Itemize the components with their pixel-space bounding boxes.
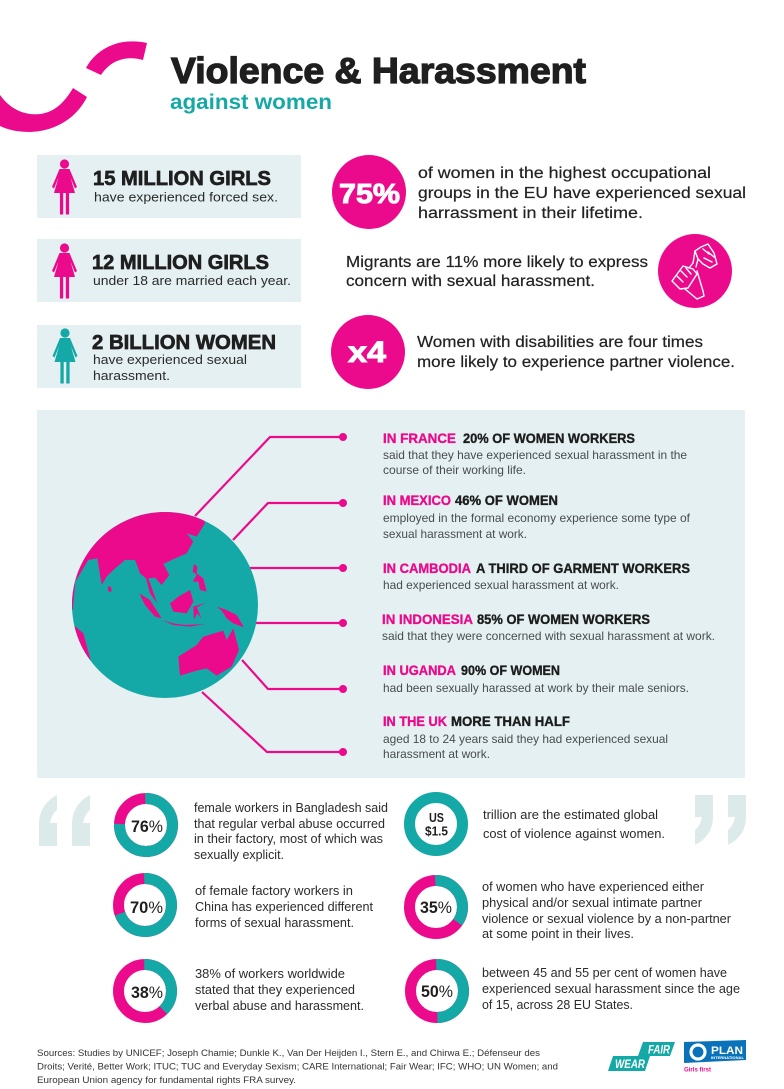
stat: 50 percent: between 45 and 55 per cent of women have [482, 966, 727, 980]
stat: 76 percent: 76% [131, 817, 163, 836]
title: Violence & Harassment [171, 50, 586, 91]
panel: 15 million girls [37, 155, 301, 218]
text: France: IN FRANCE [383, 430, 456, 446]
panel: 2 billion women: have experienced sexual [93, 352, 247, 367]
stat: 35 percent [410, 880, 731, 941]
logo: Plan International: PLAN [711, 1045, 743, 1057]
text: France [383, 430, 687, 477]
stat: 50 percent [410, 964, 740, 1018]
stat: 70 percent: forms of sexual harassment. [195, 916, 354, 930]
text: Indonesia: said that they were concerned with sexual harassment at work. [382, 629, 715, 643]
panel: 12 million girls [37, 239, 301, 302]
stat: 76 percent: sexually explicit. [194, 848, 284, 862]
subtitle: against women [170, 91, 332, 114]
stat: US 1.5 trillion: cost of violence against women. [483, 827, 665, 841]
text: UK: aged 18 to 24 years said they had experienced sexual [383, 732, 668, 746]
stat: US 1.5 trillion [410, 798, 665, 850]
text: Cambodia: A THIRD OF GARMENT WORKERS [476, 560, 690, 576]
logo swoosh [0, 41, 147, 132]
stat: 35 percent: at some point in their lives. [482, 927, 634, 941]
text: UK: harassment at work. [383, 747, 490, 761]
panel: 2 billion women [37, 325, 301, 388]
icon: closing quote [695, 795, 746, 845]
panel: 12 million girls: 12 MILLION GIRLS [92, 251, 269, 274]
stat: 70 percent [118, 878, 374, 932]
stat: 35 percent: 35% [420, 898, 452, 917]
panel: country statistics [37, 410, 745, 778]
logo: Plan International: INTERNATIONAL [711, 1056, 745, 1060]
text: Indonesia: 85% OF WOMEN WORKERS [477, 611, 650, 627]
sources: Droits; Verité, Better Work; ITUC; TUC and Everyday Sexism; CARE International; Fair Wear; IFC; WHO; UN Women; and [37, 1062, 558, 1072]
icon: woman pink [52, 159, 77, 214]
text: Cambodia: IN CAMBODIA [383, 560, 471, 576]
icon: woman teal [52, 328, 78, 384]
donut 70 [118, 878, 172, 932]
stat: 50 percent: of 15, across 28 EU States. [482, 998, 633, 1012]
stat: 76 percent: that regular verbal abuse occurred [194, 817, 385, 831]
text: Uganda: had been sexually harassed at work by their male seniors. [383, 681, 689, 695]
panel: 15 million girls: have experienced forced sex. [94, 190, 278, 204]
stat: 38 percent: 38% [131, 983, 163, 1002]
text: France: said that they have experienced sexual harassment in the [383, 448, 687, 462]
donut 50 [410, 964, 464, 1018]
logo: Plan International [684, 1040, 746, 1074]
logo: Fair Wear [608, 1042, 675, 1071]
sources: European Union agency for fundamental rights FRA survey. [37, 1075, 296, 1086]
stat: US 1.5 trillion: trillion are the estimated global [483, 808, 658, 822]
text: Mexico: employed in the formal economy experience some type of [383, 511, 691, 525]
logo: Fair Wear: WEAR [615, 1057, 645, 1071]
stat: 75 percent [332, 155, 746, 229]
panel: 2 billion women: 2 BILLION WOMEN [92, 331, 276, 354]
stat: 75 percent: harrassment in their lifetime. [418, 205, 643, 222]
text: Mexico [383, 492, 691, 541]
stat: 70 percent: China has experienced different [195, 900, 374, 914]
sources [37, 1048, 558, 1086]
donut 38 [118, 964, 172, 1018]
stat: x4: more likely to experience partner violence. [417, 354, 735, 371]
globe [67, 500, 258, 698]
text: Uganda [383, 662, 689, 695]
sources: Sources: Studies by UNICEF; Joseph Chamie; Dunkle K., Van Der Heijden I., Stern E., and Chirwa E.; Défenseur des [37, 1048, 540, 1059]
connector lines [195, 437, 343, 752]
stat: 38 percent: verbal abuse and harassment. [195, 999, 364, 1013]
text: France: 20% OF WOMEN WORKERS [463, 430, 635, 446]
text: UK: MORE THAN HALF [451, 713, 570, 729]
stat: 76 percent: female workers in Bangladesh said [194, 801, 388, 815]
text: Mexico: 46% OF WOMEN [455, 492, 558, 508]
panel: 12 million girls: under 18 are married each year. [93, 273, 291, 288]
stat: migrants [346, 234, 732, 308]
panel: 15 million girls: 15 MILLION GIRLS [93, 167, 271, 190]
logo: Plan International: Girls first [684, 1066, 712, 1074]
stat: migrants: Migrants are 11% more likely to express [346, 254, 648, 271]
icon: opening quote [39, 795, 90, 846]
donut 76 [120, 798, 172, 852]
stat: US 1.5 trillion: $1.5 [425, 824, 448, 838]
stat: 35 percent: of women who have experienced either [482, 880, 704, 894]
text: UK [383, 713, 668, 761]
donut full [410, 798, 462, 850]
stat: 70 percent: 70% [130, 898, 163, 917]
connector dots [339, 433, 347, 756]
stat: 75 percent: groups in the EU have experienced sexual [418, 185, 746, 202]
text: France: course of their working life. [383, 463, 526, 477]
stat: 38 percent [118, 964, 364, 1018]
stat: x4: x4 [348, 336, 386, 369]
stat: 38 percent: stated that they experienced [195, 983, 355, 997]
stat: x4 [331, 315, 735, 389]
icon: raised fists [672, 244, 717, 299]
text: Uganda: IN UGANDA [383, 662, 456, 678]
panel: 2 billion women: harassment. [93, 368, 170, 383]
text: Indonesia: IN INDONESIA [382, 611, 473, 627]
stat: 50 percent: 50% [421, 982, 453, 1001]
text: Cambodia [383, 560, 690, 592]
stat: US 1.5 trillion: US [429, 810, 444, 825]
stat: 75 percent: 75% [339, 178, 400, 209]
donut 35 [410, 880, 462, 934]
stat: migrants: concern with sexual harassment. [346, 273, 595, 290]
stat: 76 percent [120, 798, 388, 862]
stat: x4: Women with disabilities are four times [417, 334, 703, 351]
stat: 35 percent: physical and/or sexual intimate partner [482, 896, 702, 910]
text: Mexico: sexual harassment at work. [383, 527, 527, 541]
stat: 70 percent: of female factory workers in [195, 884, 353, 898]
text: Indonesia [382, 611, 715, 643]
text: Cambodia: had experienced sexual harassment at work. [383, 578, 619, 592]
stat: 35 percent: violence or sexual violence by a non-partner [482, 912, 731, 926]
logo: Fair Wear: FAIR [648, 1042, 670, 1056]
stat: 50 percent: experienced sexual harassment since the age [482, 982, 740, 996]
text: Uganda: 90% OF WOMEN [461, 662, 560, 678]
text: Mexico: IN MEXICO [383, 492, 451, 508]
stat: 38 percent: 38% of workers worldwide [195, 967, 345, 981]
icon: woman pink [52, 243, 77, 298]
text: UK: IN THE UK [383, 713, 447, 729]
stat: 76 percent: in their factory, most of which was [194, 832, 383, 846]
stat: 75 percent: of women in the highest occupational [418, 165, 711, 182]
